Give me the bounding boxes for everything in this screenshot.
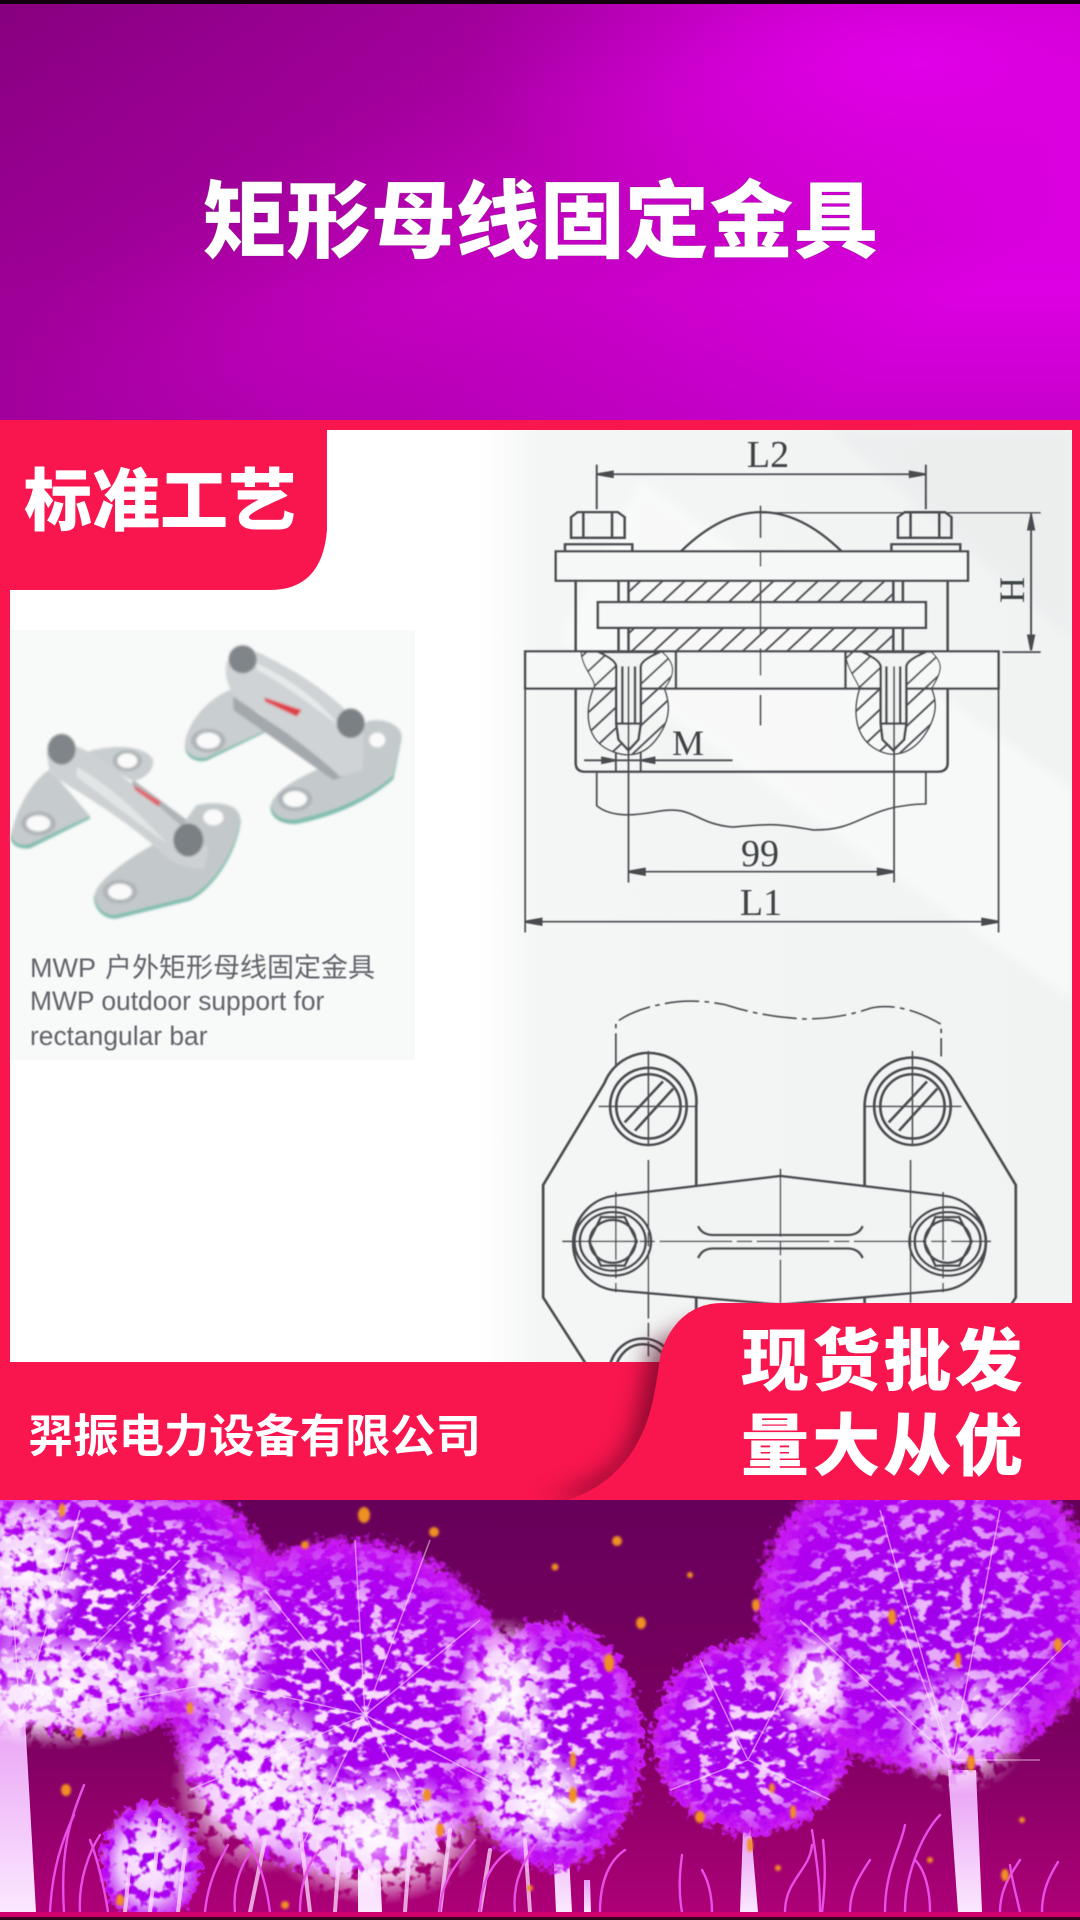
- hatched spacer and bus bar: [576, 581, 948, 651]
- callout: bottom-right red panel: 量大从优: [741, 1409, 1026, 1485]
- upper left slotted bolt: [599, 1051, 696, 1146]
- panel: red frame with white content area: [0, 420, 1080, 1500]
- left fitting: [11, 734, 241, 919]
- grass blades: [50, 1785, 1058, 1912]
- dandelion white mottling: [0, 1500, 1080, 1912]
- dimension L2: [597, 465, 926, 509]
- product caption: [30, 953, 375, 1051]
- plan view break outline: [616, 1001, 941, 1065]
- plan view mounting plates: [543, 1053, 1016, 1369]
- center line: [759, 506, 763, 725]
- drawing label: M: M: [672, 723, 704, 763]
- dandelion stems: [0, 1700, 982, 1912]
- bus bar break line: [597, 772, 926, 830]
- panel: dandelion background image: [0, 1500, 1080, 1920]
- drawing label: L1: L1: [740, 882, 782, 924]
- tag: top-left red label: 标准工艺: [24, 464, 296, 540]
- lower bolt partial: [609, 1339, 676, 1410]
- clamp center slot: [698, 1226, 863, 1258]
- dimensions 99 and L1: [525, 666, 999, 932]
- drawing label: 99: 99: [741, 833, 779, 875]
- panel: technical drawing background: [480, 430, 1072, 1370]
- dandelion seed spokes: [10, 1510, 1070, 1850]
- left hex bolt: [575, 1207, 651, 1276]
- product caption: MWP 户外矩形母线固定金具: [30, 953, 375, 983]
- base plate and lower body: [525, 651, 999, 772]
- white blades under the central dandelion: [125, 1820, 530, 1912]
- product photo: [11, 645, 402, 919]
- tag: top-left red label: [0, 420, 327, 600]
- bottom edge: [0, 1912, 1080, 1920]
- dimension H: [1002, 514, 1041, 652]
- fold shadow: [540, 1320, 700, 1498]
- floating orange sparks: [59, 1503, 1062, 1909]
- anchor bolts: [599, 652, 926, 750]
- panel: product photo background: [10, 630, 415, 1060]
- nuts and cover plate: [556, 512, 1041, 581]
- right hex bolt: [909, 1207, 986, 1276]
- technical drawing: plan view: [543, 1001, 1016, 1410]
- callout: bottom-right red panel: [568, 1303, 1080, 1500]
- drawing label: L2: L2: [747, 434, 789, 476]
- callout: bottom-right red panel: 现货批发: [741, 1324, 1026, 1400]
- drawing label: H: H: [992, 577, 1032, 603]
- plan view center lines: [562, 1160, 991, 1356]
- dimension M: [584, 752, 733, 772]
- product caption: MWP outdoor support for: [30, 986, 325, 1016]
- top banner background: [0, 0, 1080, 420]
- dense white areas: [0, 1485, 1030, 1905]
- dandelion heads: [0, 1500, 1080, 1912]
- center clamp bar: [573, 1176, 986, 1305]
- bottom red band with company name: 羿振电力设备有限公司: [28, 1411, 481, 1462]
- upper right slotted bolt: [865, 1051, 961, 1146]
- product caption: rectangular bar: [30, 1021, 208, 1051]
- technical drawing: side section view: [525, 465, 1041, 932]
- right fitting: [185, 645, 402, 824]
- bottom red band with company name: [0, 1362, 1080, 1500]
- title: 矩形母线固定金具: [202, 175, 878, 269]
